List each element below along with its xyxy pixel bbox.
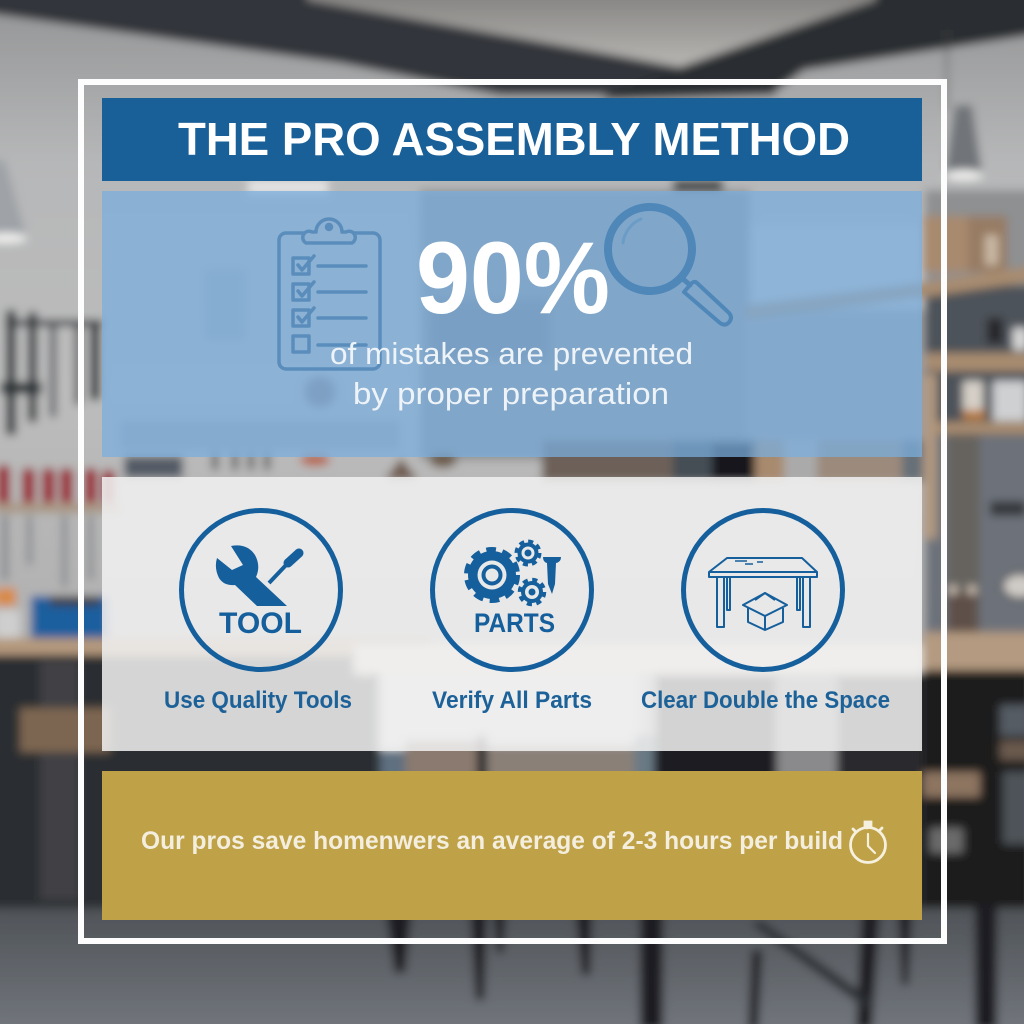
title: THE PRO ASSEMBLY METHOD bbox=[178, 113, 850, 165]
centre white table bbox=[355, 645, 925, 673]
blue storage box bbox=[31, 596, 109, 638]
panel: time savings callout bbox=[102, 771, 922, 920]
label: Use Quality Tools bbox=[164, 687, 352, 714]
outer white frame bbox=[81, 82, 944, 941]
icon: wrench and screwdriver: TOOL bbox=[219, 607, 302, 640]
title banner bbox=[102, 98, 922, 181]
pegboard tools bbox=[0, 310, 103, 435]
workbench bbox=[0, 638, 430, 656]
icon: gears and screw: PARTS bbox=[474, 608, 555, 638]
strips seen above panels bbox=[248, 180, 328, 194]
description text: of mistakes are prevented bbox=[330, 336, 693, 371]
big number: 90% bbox=[416, 221, 610, 335]
icon: wrench and screwdriver bbox=[182, 510, 340, 670]
red tool handles bbox=[0, 465, 115, 505]
panel: three preparation steps bbox=[102, 477, 922, 751]
right table top and chairs bbox=[923, 632, 1024, 670]
right wall and shelves bbox=[925, 190, 1024, 290]
chair legs bbox=[385, 905, 997, 1024]
callout text: Our pros save homenwers an average of 2-3 hours per build bbox=[141, 827, 843, 855]
panel: 90% statistic bbox=[102, 191, 922, 457]
step: quality tools bbox=[164, 510, 352, 714]
label: Clear Double the Space bbox=[641, 687, 890, 714]
description text: by proper preparation bbox=[353, 376, 669, 411]
icon: gears and screw bbox=[432, 510, 592, 670]
description text bbox=[330, 336, 693, 411]
floor bbox=[0, 908, 1024, 1024]
icon: stopwatch bbox=[850, 822, 886, 862]
icon: table and box bbox=[684, 510, 842, 670]
ceiling bbox=[307, 0, 876, 67]
icon: magnifying glass bbox=[608, 207, 731, 325]
items at panel gap bbox=[124, 456, 183, 478]
icon: clipboard checklist bbox=[279, 219, 380, 369]
label: Verify All Parts bbox=[432, 687, 592, 714]
tones behind blue panel bbox=[420, 190, 750, 460]
step: verify parts bbox=[432, 510, 592, 714]
step: clear space bbox=[641, 510, 890, 714]
hanging lamps bbox=[946, 30, 948, 110]
